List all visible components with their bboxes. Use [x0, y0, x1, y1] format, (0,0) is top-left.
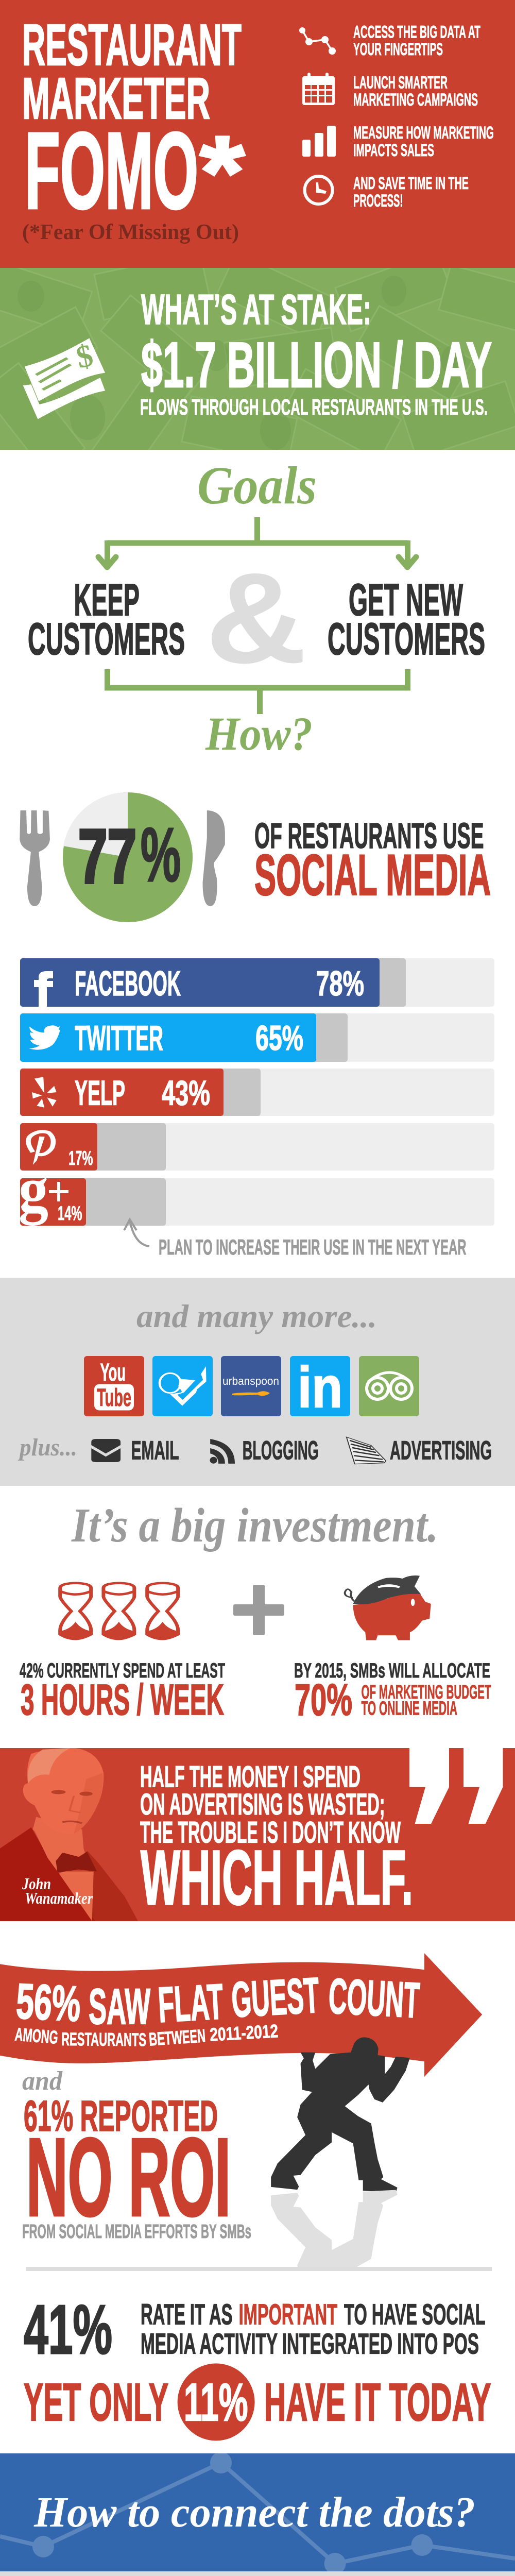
stat: 3 hours per week: 42% CURRENTLY SPEND AT LEAST [20, 1659, 225, 1682]
tile: foursquare [152, 1356, 213, 1416]
icon: email [91, 1439, 121, 1462]
icon: knife [202, 810, 225, 906]
benefit: big data: YOUR FINGERTIPS [353, 40, 443, 59]
icon: bars [302, 126, 336, 157]
text: of restaurants use social media [254, 816, 491, 907]
text: rate it as important: RATE IT AS [141, 2298, 233, 2331]
title: MARKETER [22, 66, 210, 131]
bar: google plus [20, 1178, 494, 1226]
text: rate it as important [141, 2298, 486, 2361]
icon: dollar bill: $ [73, 338, 96, 376]
panel: and many more [0, 1278, 515, 1486]
panel: what's at stake [0, 268, 515, 450]
icon: clock [305, 176, 333, 204]
subtitle: (*Fear Of Missing Out) [22, 221, 239, 244]
portrait: john wanamaker [0, 1748, 138, 1921]
bar: facebook: FACEBOOK [75, 964, 181, 1003]
script: and: and [22, 2066, 63, 2096]
benefit: measure: IMPACTS SALES [353, 141, 434, 160]
tile: urbanspoon [221, 1356, 281, 1416]
banner headline: FLAT [157, 1973, 225, 2033]
bar: yelp [20, 1069, 494, 1116]
script heading: How?: How? [205, 707, 313, 760]
icon: fork [20, 810, 50, 906]
text: yet only 11 percent: YET ONLY [24, 2372, 168, 2432]
pie chart plate [63, 792, 193, 922]
icon: google plus [20, 1178, 68, 1226]
quote text [140, 1760, 413, 1921]
tile: linkedin: in [298, 1355, 342, 1419]
banner headline: COUNT [327, 1968, 421, 2028]
stat: 61 percent no roi [22, 2092, 251, 2243]
panel: social bar chart [19, 958, 494, 1259]
icon: plus sign [233, 1585, 284, 1635]
arrow: curved [124, 1219, 149, 1246]
silhouette reflection [271, 2190, 398, 2267]
caption: name: John [22, 1874, 51, 1893]
icon: twitter bird [29, 1025, 60, 1050]
banner subhead: AMONG [14, 2024, 59, 2048]
bar: facebook: 78% [316, 964, 364, 1003]
bar: twitter [20, 1013, 494, 1062]
banner subhead: BETWEEN [148, 2025, 206, 2050]
benefit: campaigns [353, 73, 478, 110]
banner headline [15, 1967, 421, 2035]
benefit: measure [353, 123, 494, 160]
bar: pinterest [20, 1123, 494, 1171]
script: plus: plus... [18, 1434, 77, 1461]
panel: goals [28, 456, 485, 760]
icon: yelp burst [32, 1077, 57, 1108]
icon: calendar [302, 73, 335, 105]
silhouette: man pushing arrow [271, 2037, 410, 2193]
goal: keep customers: CUSTOMERS [28, 614, 185, 664]
stat: 3 hours per week: 3 HOURS / WEEK [21, 1675, 224, 1724]
text: yet only 11 percent: 11% [184, 2372, 248, 2432]
stat: 41 percent: 41% [24, 2291, 112, 2368]
tile: youtube: You [100, 1359, 126, 1386]
text: rate it as important: IMPORTANT [239, 2298, 337, 2331]
bar: pinterest: 17% [68, 1147, 93, 1170]
stat: 61 percent no roi: FROM SOCIAL MEDIA EFFORTS BY SMBs [22, 2221, 251, 2243]
icon: facebook f [34, 971, 53, 1007]
script heading: Goals: Goals [197, 456, 317, 515]
script heading: It’s a big investment. [71, 1499, 438, 1552]
panel: how to connect the dots [0, 2452, 515, 2574]
bar: yelp: 43% [162, 1074, 210, 1113]
tile: urbanspoon: urbanspoon [222, 1375, 279, 1387]
icon: hourglasses [60, 1583, 178, 1639]
banner subhead: 2011-2012 [209, 2020, 279, 2045]
background: line graph [0, 2452, 515, 2574]
title [22, 12, 245, 231]
icon: newspaper [347, 1437, 386, 1464]
benefit: save time: PROCESS! [353, 191, 403, 211]
label: email: EMAIL [131, 1436, 179, 1465]
panel: 77 percent [20, 792, 491, 922]
stat: 77%: 77 [78, 814, 136, 899]
stat: 70 percent [294, 1659, 491, 1725]
icon: piggy bank [345, 1575, 431, 1640]
panel: big investment [20, 1499, 491, 1725]
title: RESTAURANT [22, 12, 242, 77]
bar: google plus: 14% [58, 1202, 82, 1225]
bar: yelp: YELP [75, 1074, 125, 1113]
stat: 77%: % [141, 812, 181, 897]
stat: 61 percent no roi: 61% REPORTED [24, 2092, 218, 2140]
bar: facebook [20, 958, 494, 1007]
goal: new customers [328, 575, 485, 664]
label: blogging: BLOGGING [243, 1436, 319, 1465]
tile: youtube: Tube [97, 1384, 131, 1412]
bracket connector [107, 669, 408, 714]
ampersand: & [205, 546, 307, 690]
text: yet only 11 percent [24, 2363, 491, 2441]
caption: name: Wanamaker [25, 1889, 93, 1907]
icon: dollar bill [23, 338, 105, 419]
bar: twitter: TWITTER [75, 1019, 163, 1058]
background: dollar bills pattern [0, 251, 515, 478]
title: * [200, 115, 245, 230]
panel: flat guest count [0, 1953, 492, 2298]
panel: pos integration [24, 2291, 491, 2441]
goal: keep customers: KEEP [74, 575, 140, 625]
banner headline: SAW [89, 1978, 150, 2035]
benefit: save time [353, 174, 469, 211]
caption: name [22, 1874, 93, 1907]
icon: pinterest p [28, 1131, 53, 1165]
panel: big data hub [0, 2571, 515, 2576]
banner headline: 56% [15, 1973, 82, 2032]
connector arrows [98, 517, 416, 567]
bar: twitter: 65% [255, 1019, 303, 1058]
banner subhead: RESTAURANTS [61, 2028, 146, 2050]
benefit: big data [353, 23, 480, 59]
benefit: campaigns: LAUNCH SMARTER [353, 73, 448, 93]
goal: keep customers [28, 575, 185, 664]
script heading: and many more... [136, 1298, 377, 1334]
panel: header [0, 0, 515, 268]
panel: wanamaker quote [0, 1748, 515, 1921]
script heading: How to connect the dots? [33, 2488, 475, 2536]
tile: youtube [84, 1356, 144, 1416]
banner subhead [14, 2020, 279, 2050]
stat: 61 percent no roi: NO ROI [26, 2115, 231, 2239]
stat: 3 hours per week [20, 1659, 225, 1724]
arrow banner [0, 1953, 482, 2077]
stat: 70 percent: 70% [295, 1675, 352, 1725]
title: FOMO [25, 110, 198, 231]
banner headline: GUEST [230, 1967, 321, 2028]
tile: tripadvisor [359, 1356, 419, 1416]
quote marks [409, 1748, 503, 1824]
icon: rss [210, 1439, 235, 1464]
icon: google plus: g [19, 1154, 48, 1226]
icon: network [299, 27, 336, 55]
